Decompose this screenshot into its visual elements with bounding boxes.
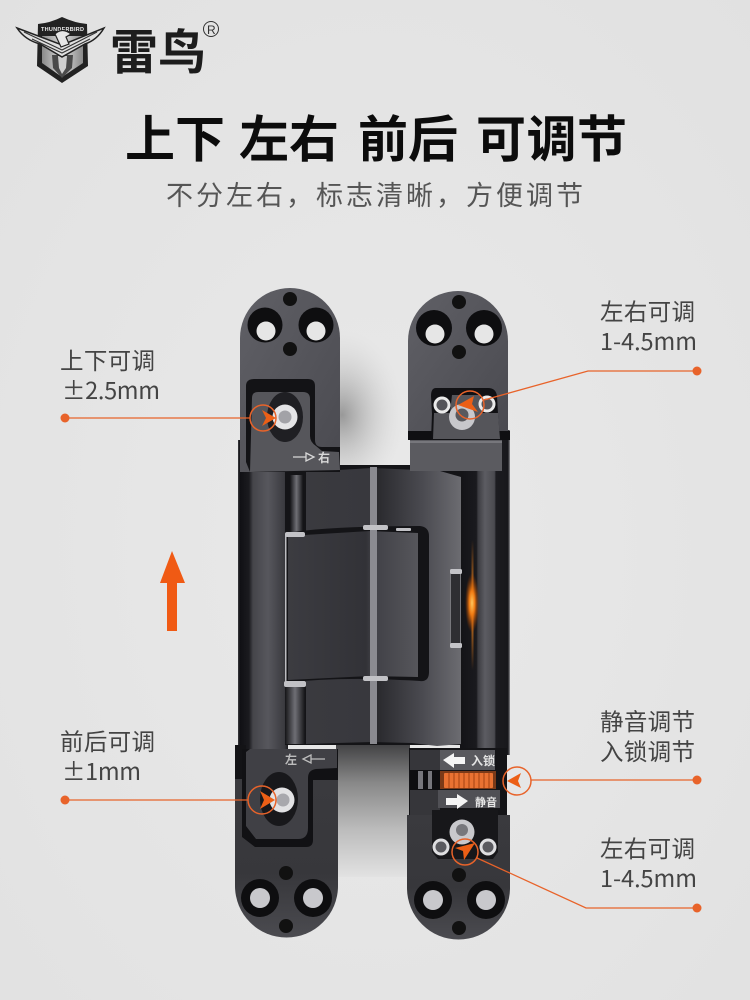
engraved arrow mark: 右 bbox=[318, 450, 330, 465]
label value: 入锁调节 bbox=[600, 733, 695, 767]
hinge pin top bbox=[290, 475, 303, 533]
bottom left screw holes bbox=[241, 866, 332, 933]
label text: 上下可调 bbox=[60, 342, 155, 376]
silver washers bbox=[284, 525, 411, 687]
leader line bbox=[503, 767, 702, 795]
leader line bbox=[452, 839, 702, 912]
hinge upper knuckle bbox=[306, 468, 461, 746]
center pin bbox=[370, 467, 377, 744]
leader line bbox=[456, 366, 702, 419]
label value: 1-4.5mm bbox=[600, 860, 697, 894]
hinge pin bottom bbox=[285, 682, 305, 744]
title: 可调节 bbox=[476, 112, 628, 168]
bottom right adjuster block bbox=[409, 748, 507, 818]
hinge product bbox=[235, 288, 510, 939]
top left plate bbox=[240, 288, 340, 472]
shadow between upper plates bbox=[280, 330, 404, 500]
title bbox=[125, 112, 628, 168]
engraved arrow mark bbox=[285, 752, 325, 767]
label value: ±1mm bbox=[62, 753, 141, 787]
label text: 静音调节 bbox=[600, 703, 695, 737]
bottom right screw holes bbox=[414, 868, 505, 935]
callout: left-right adjust top bbox=[456, 293, 702, 419]
logo: 雷鸟 brand bbox=[17, 17, 218, 83]
callout: left-right adjust bottom bbox=[452, 830, 702, 912]
top right plate bbox=[408, 291, 510, 471]
callout: up-down adjust bbox=[60, 342, 276, 431]
callout: front-back adjust bbox=[60, 723, 276, 814]
arrow: upward orange bbox=[160, 551, 185, 631]
top right screw holes bbox=[416, 295, 502, 359]
bottom right plate bbox=[407, 810, 510, 939]
shadow between lower plates bbox=[336, 742, 410, 877]
hinge body channel right bbox=[460, 430, 510, 755]
callout: silent and lock adjust bbox=[503, 703, 702, 795]
subtitle: 不分左右，标志清晰，方便调节 bbox=[166, 181, 586, 211]
leader line bbox=[60, 786, 276, 814]
top left screw holes bbox=[248, 292, 334, 356]
title: 左右 bbox=[239, 112, 339, 168]
side latch with orange glow bbox=[450, 540, 479, 670]
label value: ±2.5mm bbox=[62, 372, 160, 406]
engraved arrow mark bbox=[293, 450, 330, 465]
brand name: 雷鸟 bbox=[110, 27, 206, 80]
label text: 左右可调 bbox=[600, 293, 695, 327]
registered mark: R bbox=[207, 23, 216, 37]
label value: 1-4.5mm bbox=[600, 323, 697, 357]
hinge wing bbox=[286, 526, 429, 683]
orange gear bbox=[440, 771, 496, 789]
lock-in arrow label: 入锁 bbox=[471, 753, 495, 768]
label text: 前后可调 bbox=[60, 723, 155, 757]
title: 前后 bbox=[358, 112, 458, 168]
icon: eagle shield emblem: THUNDERBIRD bbox=[41, 27, 84, 33]
hinge body channel left bbox=[238, 440, 288, 750]
title: 上下 bbox=[125, 112, 225, 168]
engraved arrow mark: 左 bbox=[285, 752, 297, 767]
icon: eagle shield emblem bbox=[17, 17, 104, 83]
bottom left plate bbox=[235, 745, 338, 938]
registered mark bbox=[204, 22, 218, 37]
label text: 左右可调 bbox=[600, 830, 695, 864]
leader line bbox=[60, 405, 276, 431]
silent arrow label: 静音 bbox=[475, 795, 497, 809]
